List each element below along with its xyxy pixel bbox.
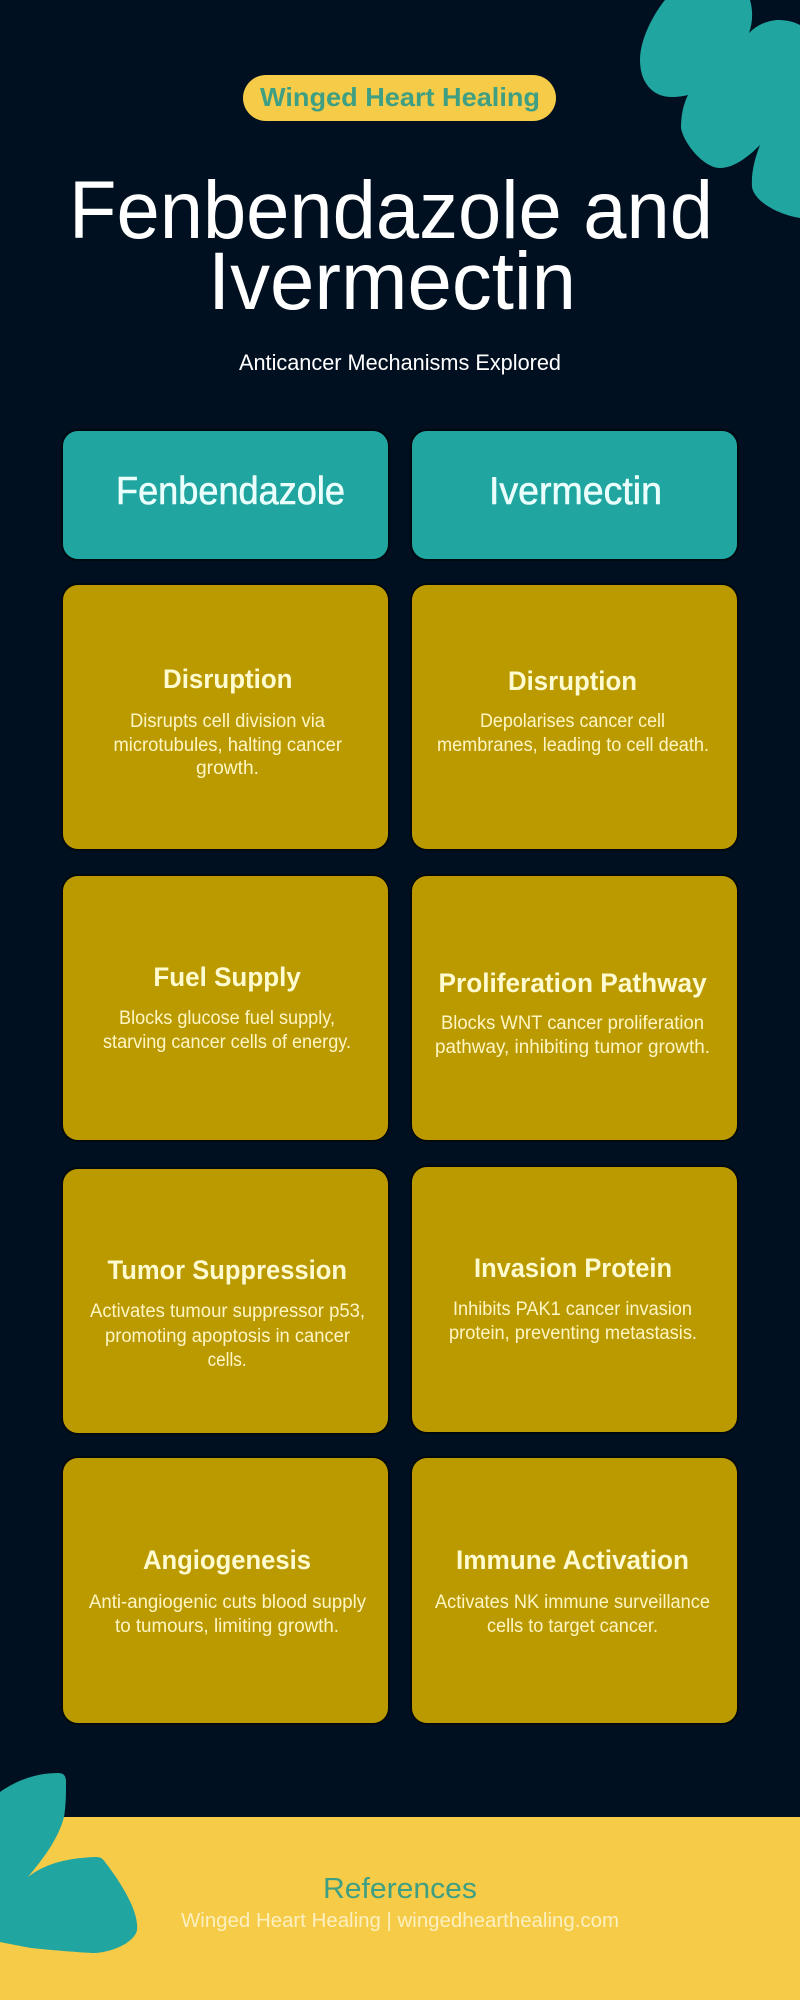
column header: Ivermectin bbox=[412, 431, 737, 559]
card: Invasion Protein: protein, preventing metastasis. bbox=[449, 1323, 697, 1344]
footer text bbox=[181, 1873, 619, 1932]
card: Fenbendazole disruption: growth. bbox=[196, 758, 259, 779]
card: Proliferation Pathway bbox=[412, 876, 737, 1140]
card: Fuel Supply: Blocks glucose fuel supply, bbox=[119, 1008, 335, 1029]
card: Ivermectin disruption bbox=[412, 585, 737, 849]
card: Fenbendazole disruption: Disruption bbox=[163, 664, 292, 694]
column header: Fenbendazole bbox=[63, 431, 388, 559]
column header: Ivermectin: Ivermectin bbox=[489, 470, 662, 513]
card: Proliferation Pathway: Proliferation Pathway bbox=[438, 968, 707, 998]
card: Invasion Protein: Inhibits PAK1 cancer invasion bbox=[453, 1299, 692, 1320]
subtitle: Anticancer Mechanisms Explored bbox=[239, 350, 561, 375]
title bbox=[69, 165, 713, 327]
footer band bbox=[0, 1817, 800, 2000]
card: Fenbendazole disruption bbox=[63, 585, 388, 849]
card: Immune Activation bbox=[412, 1458, 737, 1723]
card: Ivermectin disruption: membranes, leading to cell death. bbox=[437, 735, 709, 756]
card: Fenbendazole disruption: Disrupts cell division via bbox=[130, 711, 325, 732]
footer text: References bbox=[323, 1873, 477, 1905]
card: Tumor Suppression: Activates tumour suppressor p53, bbox=[90, 1301, 365, 1322]
card: Tumor Suppression bbox=[63, 1169, 388, 1433]
card: Proliferation Pathway: pathway, inhibiting tumor growth. bbox=[435, 1037, 710, 1058]
card: Immune Activation: cells to target cancer. bbox=[487, 1616, 658, 1637]
card: Fuel Supply: starving cancer cells of energy. bbox=[103, 1032, 351, 1053]
card: Angiogenesis bbox=[63, 1458, 388, 1723]
card: Immune Activation: Activates NK immune surveillance bbox=[435, 1592, 710, 1613]
brand pill: Winged Heart Healing bbox=[260, 82, 540, 112]
footer text: Winged Heart Healing | wingedhearthealing.com bbox=[181, 1910, 619, 1932]
title: Fenbendazole and bbox=[69, 165, 713, 256]
card: Angiogenesis: Anti-angiogenic cuts blood supply bbox=[89, 1592, 366, 1613]
card: Tumor Suppression: cells. bbox=[208, 1350, 247, 1371]
card: Immune Activation: Immune Activation bbox=[456, 1545, 689, 1575]
card: Fuel Supply: Fuel Supply bbox=[153, 962, 301, 992]
title: Ivermectin bbox=[208, 236, 576, 327]
card: Tumor Suppression: Tumor Suppression bbox=[108, 1255, 347, 1285]
card: Fuel Supply bbox=[63, 876, 388, 1140]
decorative flower shape top right bbox=[640, 0, 800, 218]
card: Invasion Protein: Invasion Protein bbox=[474, 1253, 672, 1283]
card: Proliferation Pathway: Blocks WNT cancer proliferation bbox=[441, 1013, 704, 1034]
card: Invasion Protein bbox=[412, 1167, 737, 1432]
decorative leaf shape bottom left bbox=[0, 1773, 137, 1953]
card: Ivermectin disruption: Disruption bbox=[508, 666, 637, 696]
card: Ivermectin disruption: Depolarises cancer cell bbox=[480, 711, 665, 732]
card: Tumor Suppression: promoting apoptosis in cancer bbox=[105, 1326, 351, 1347]
card: Fenbendazole disruption: microtubules, halting cancer bbox=[114, 735, 343, 756]
card: Angiogenesis: Angiogenesis bbox=[143, 1545, 311, 1575]
column header: Fenbendazole: Fenbendazole bbox=[116, 470, 345, 513]
card: Angiogenesis: to tumours, limiting growth. bbox=[115, 1616, 339, 1637]
brand pill bbox=[243, 75, 556, 121]
